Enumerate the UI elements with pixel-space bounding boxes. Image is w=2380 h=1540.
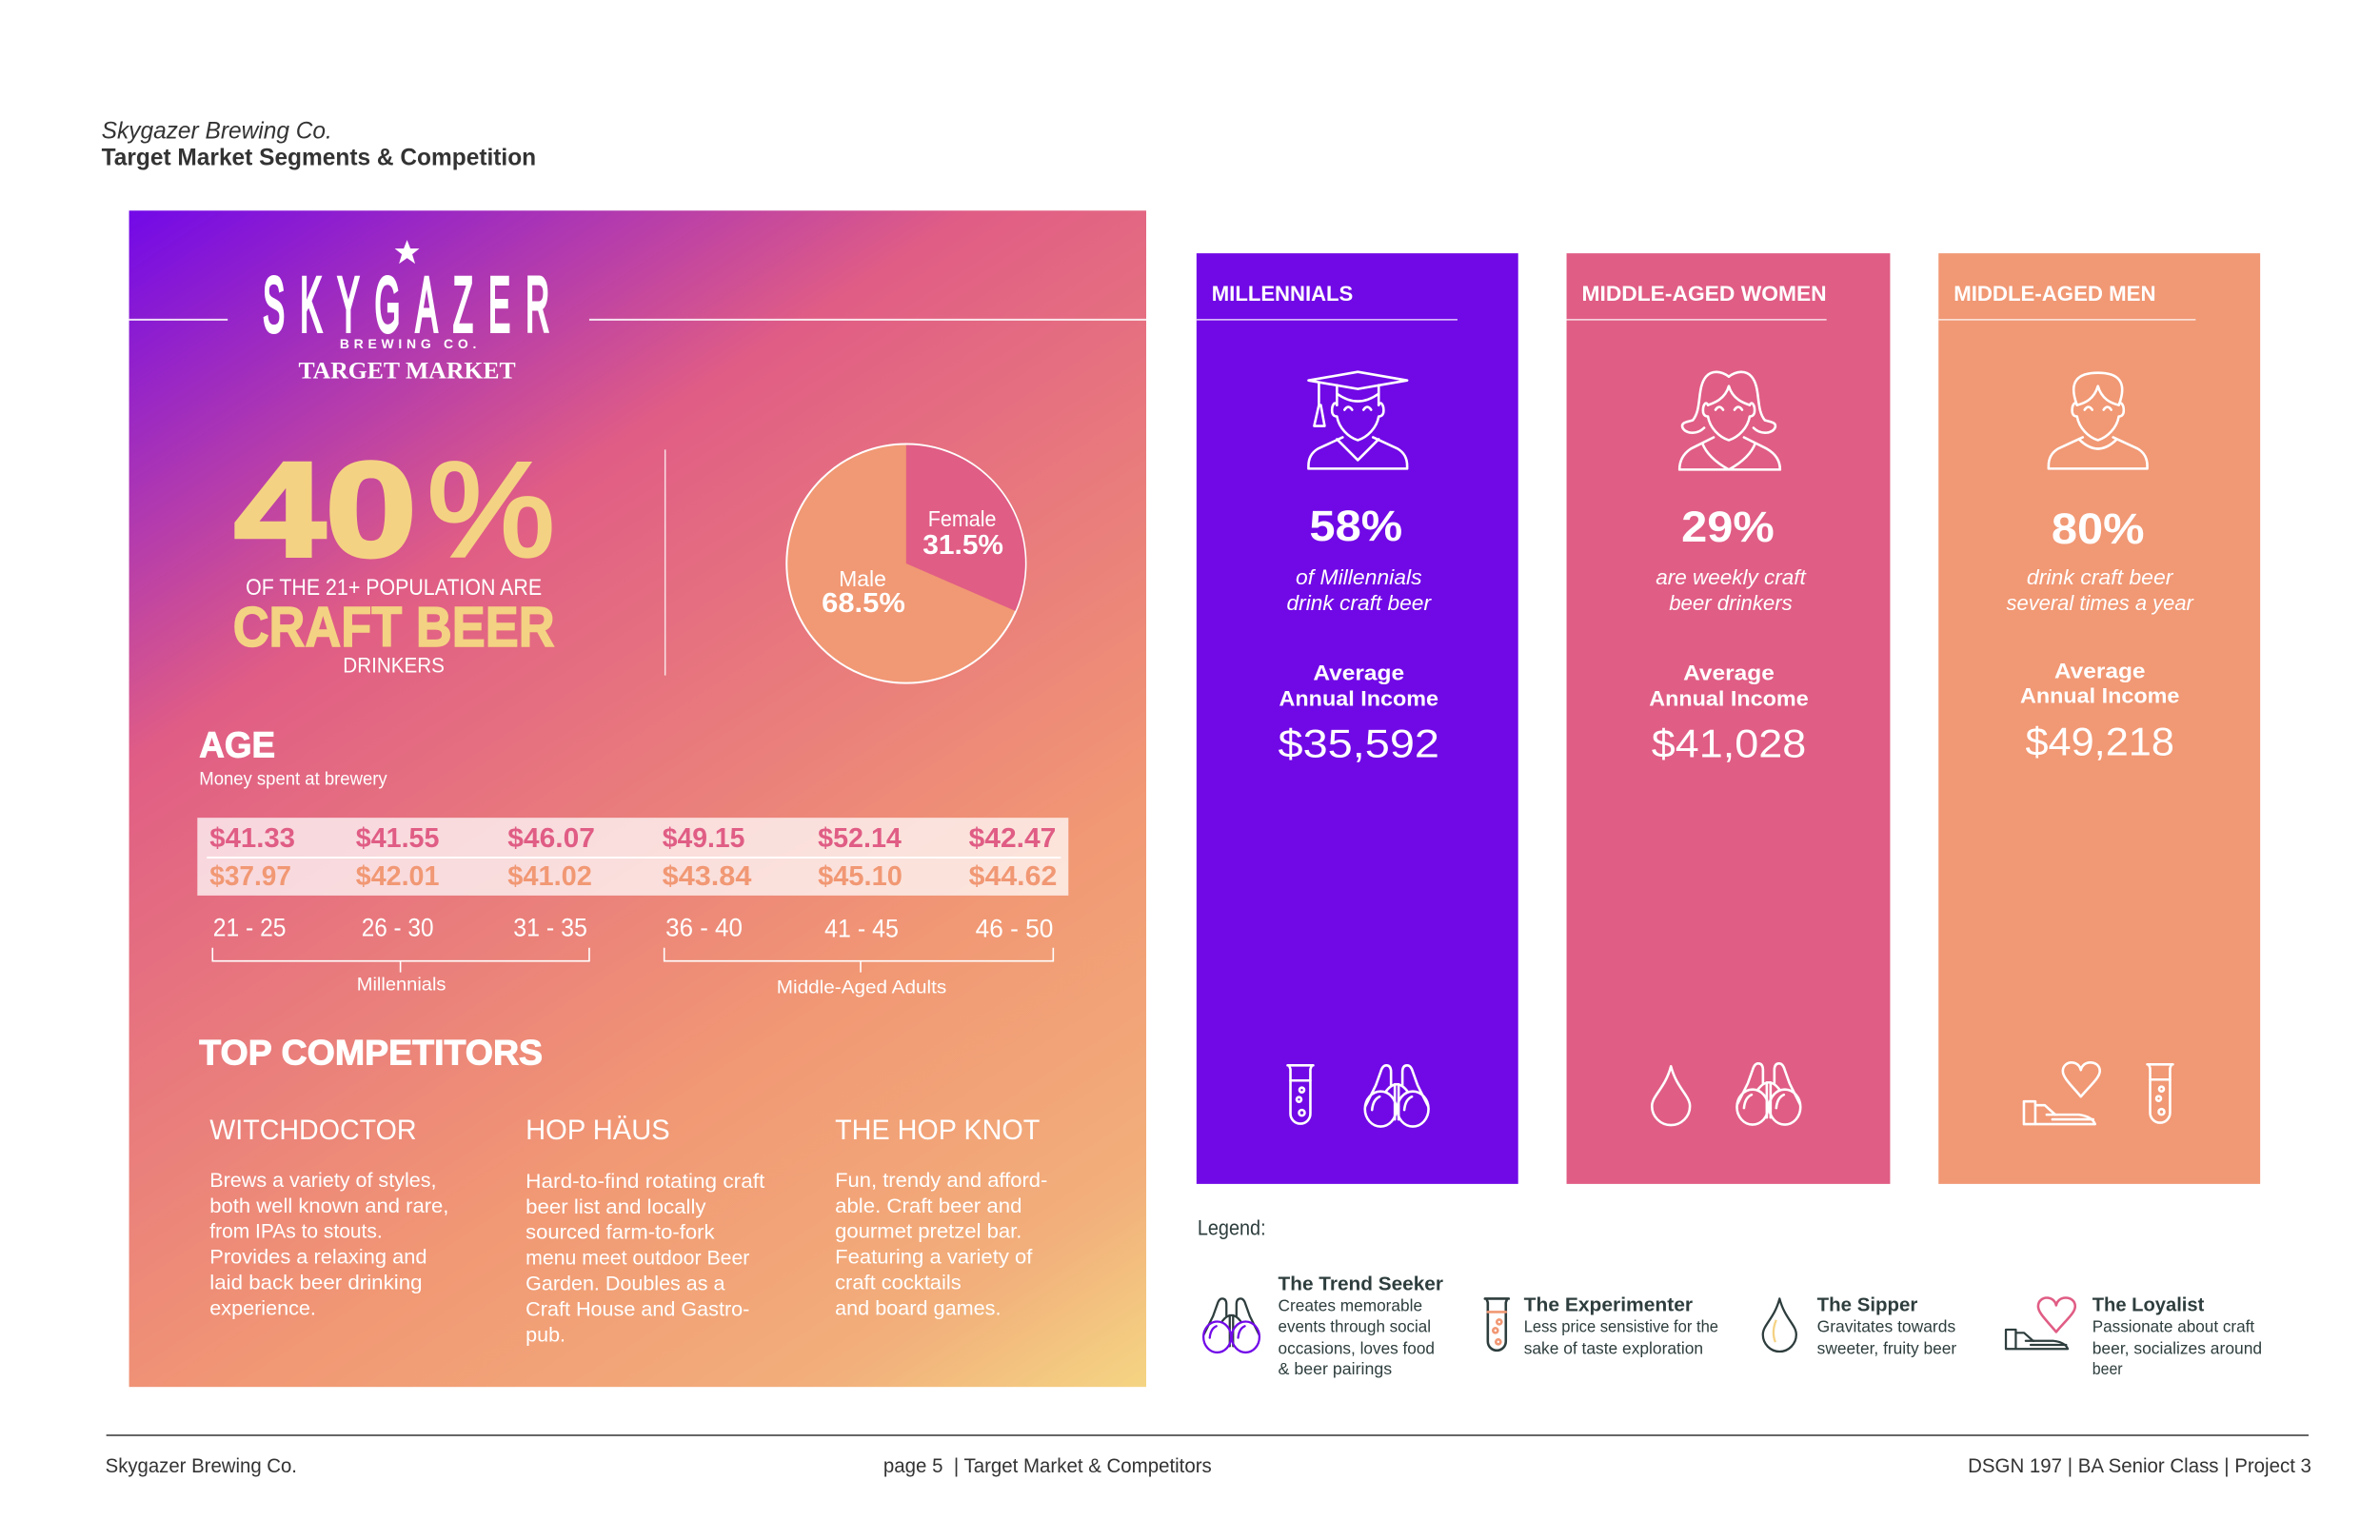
competitor: the hop knot: and board games.	[835, 1297, 1002, 1319]
competitor: the hop knot: Featuring a variety of	[835, 1247, 1033, 1269]
legend: the sipper: sweeter, fruity beer	[1817, 1338, 1956, 1357]
icon: binoculars	[1365, 1065, 1429, 1127]
statistic caption: are weekly craft	[1656, 565, 1807, 589]
bottom row values: $44.62	[969, 861, 1057, 892]
competitor: hop haus: HOP HÄUS	[526, 1115, 670, 1146]
legend: the loyalist: Passionate about craft	[2092, 1316, 2254, 1335]
gradient background	[129, 210, 1146, 1387]
competitor: witchdoctor: from IPAs to stouts.	[209, 1221, 383, 1243]
competitor: hop haus: Craft House and Gastro-	[526, 1298, 749, 1320]
income label	[1279, 661, 1438, 711]
competitors heading: TOP COMPETITORS	[199, 1033, 543, 1072]
age range labels: 31 - 35	[513, 914, 587, 942]
legend: the experimenter: sake of taste exploration	[1524, 1338, 1703, 1357]
page header	[102, 118, 536, 170]
40 percent: %	[427, 434, 555, 584]
logo	[263, 240, 549, 385]
bottom row values: $42.01	[356, 861, 439, 892]
age heading: AGE	[199, 725, 275, 765]
footer center: page 5 | Target Market & Competitors	[883, 1455, 1212, 1477]
age range labels	[213, 914, 1053, 943]
icon: binoculars	[1203, 1298, 1259, 1352]
icon: drop	[1652, 1066, 1690, 1125]
spending table band	[197, 818, 1068, 896]
top row values: $42.47	[969, 823, 1056, 854]
male label: Male	[839, 566, 886, 591]
income value: $41,028	[1652, 721, 1806, 765]
header subtitle: Target Market Segments & Competition	[102, 144, 536, 170]
middle-aged bracket	[664, 948, 1053, 973]
legend	[1198, 1216, 2262, 1378]
bottom row values: $45.10	[818, 861, 902, 892]
bottom row values: $43.84	[663, 861, 751, 892]
legend: the trend seeker: occasions, loves food	[1279, 1338, 1435, 1357]
legend: the loyalist: beer	[2092, 1359, 2123, 1378]
competitor: the hop knot	[835, 1115, 1047, 1319]
panel: middle-aged women	[1567, 253, 1890, 1184]
male slice	[786, 444, 1025, 683]
income value: $49,218	[2025, 719, 2174, 763]
top row values: $41.55	[356, 823, 439, 854]
competitor: witchdoctor: both well known and rare,	[209, 1195, 448, 1217]
age range labels: 41 - 45	[824, 915, 899, 943]
legend: the trend seeker	[1203, 1274, 1443, 1378]
legend: the trend seeker: The Trend Seeker	[1279, 1274, 1443, 1295]
legend: the loyalist	[2006, 1294, 2262, 1378]
age subheading: Money spent at brewery	[199, 769, 387, 789]
income label: Annual Income	[1649, 687, 1809, 711]
icon: woman	[1679, 372, 1780, 469]
top row values: $49.15	[663, 823, 744, 854]
competitor: witchdoctor: experience.	[209, 1297, 316, 1319]
statistic: 29%	[1681, 503, 1775, 551]
competitor: the hop knot: Fun, trendy and afford-	[835, 1170, 1047, 1192]
competitor: hop haus: pub.	[526, 1324, 565, 1346]
panel: millennials	[1197, 253, 1518, 1184]
legend: the trend seeker: events through social	[1279, 1316, 1431, 1335]
competitor: hop haus: Garden. Doubles as a	[526, 1273, 725, 1295]
icon: graduate	[1308, 372, 1407, 468]
statistic caption	[1656, 565, 1807, 615]
age range labels: 36 - 40	[665, 914, 743, 942]
legend: the sipper: The Sipper	[1817, 1294, 1918, 1315]
statistic caption: drink craft beer	[1287, 591, 1433, 615]
female slice	[906, 444, 1025, 611]
panel: target market	[129, 210, 1146, 1387]
card background	[1567, 253, 1890, 1184]
card title: MILLENNIALS	[1212, 282, 1353, 306]
millennials bracket	[212, 948, 589, 973]
competitor: hop haus: beer list and locally	[526, 1196, 706, 1218]
competitor: hop haus: Hard-to-find rotating craft	[526, 1171, 765, 1193]
competitor: witchdoctor: WITCHDOCTOR	[209, 1115, 417, 1146]
legend heading: Legend:	[1198, 1216, 1266, 1240]
bottom row values: $37.97	[209, 861, 291, 892]
legend: the sipper: Gravitates towards	[1817, 1316, 1955, 1335]
logo tagline: BREWING CO.	[340, 336, 476, 351]
statistic: 58%	[1309, 502, 1402, 550]
statistic caption: drink craft beer	[2027, 565, 2174, 589]
icon: binoculars	[1736, 1063, 1800, 1125]
card title: MIDDLE-AGED WOMEN	[1581, 282, 1827, 306]
income label	[1649, 661, 1809, 711]
competitor: the hop knot: able. Craft beer and	[835, 1195, 1021, 1217]
icon: test tube	[2148, 1064, 2172, 1123]
legend: the experimenter: Less price sensistive for the	[1524, 1316, 1718, 1335]
card background	[1197, 253, 1518, 1184]
statistic caption: OF THE 21+ POPULATION ARE	[246, 575, 542, 601]
logo wordmark: SKYGAZER	[263, 262, 549, 348]
40 percent: 40	[234, 434, 417, 584]
competitor: witchdoctor: Brews a variety of styles,	[209, 1170, 436, 1192]
headline statistic	[233, 434, 555, 678]
statistic caption	[1287, 565, 1433, 615]
age range labels: 21 - 25	[213, 914, 287, 942]
top row values: $41.33	[209, 823, 295, 854]
statistic caption: of Millennials	[1296, 565, 1422, 589]
pie chart: gender split	[786, 444, 1025, 683]
statistic caption	[2007, 565, 2195, 615]
header company name: Skygazer Brewing Co.	[102, 118, 332, 145]
income label	[2020, 660, 2179, 708]
income label: Annual Income	[1279, 687, 1438, 711]
middle-aged adults label: Middle-Aged Adults	[777, 977, 947, 998]
icon: test tube	[1485, 1298, 1509, 1351]
competitors section	[199, 1033, 1047, 1346]
competitor: hop haus: sourced farm-to-fork	[526, 1222, 715, 1244]
icon: star	[395, 240, 420, 264]
legend: the sipper	[1763, 1294, 1956, 1357]
top row values: $46.07	[507, 823, 595, 854]
income label: Annual Income	[2020, 684, 2179, 708]
competitor: witchdoctor: laid back beer drinking	[209, 1273, 423, 1294]
income label: Average	[2054, 660, 2146, 683]
icon: drop	[1763, 1298, 1796, 1352]
income label: Average	[1313, 661, 1404, 685]
statistic: 80%	[2052, 504, 2145, 553]
legend: the experimenter: The Experimenter	[1524, 1294, 1693, 1315]
card background	[1938, 253, 2260, 1184]
bottom row values	[209, 861, 1057, 892]
age range labels: 46 - 50	[976, 915, 1053, 943]
age section	[197, 725, 1068, 998]
top row values	[209, 823, 1056, 854]
competitor: the hop knot: THE HOP KNOT	[835, 1115, 1040, 1146]
competitor: witchdoctor	[209, 1115, 448, 1319]
icon: hand and heart	[2006, 1297, 2075, 1349]
legend: the trend seeker: Creates memorable	[1279, 1295, 1422, 1314]
competitor: hop haus: menu meet outdoor Beer	[526, 1248, 749, 1270]
footer left: Skygazer Brewing Co.	[106, 1455, 297, 1477]
icon: man	[2049, 373, 2148, 468]
target market heading: TARGET MARKET	[298, 359, 516, 385]
panel: middle-aged men	[1938, 253, 2260, 1184]
competitor: the hop knot: craft cocktails	[835, 1273, 962, 1294]
bottom row values: $41.02	[507, 861, 592, 892]
income value: $35,592	[1279, 721, 1439, 765]
craft beer: CRAFT BEER	[233, 595, 555, 659]
legend: the loyalist: beer, socializes around	[2092, 1338, 2262, 1357]
icon: test tube	[1288, 1065, 1313, 1124]
statistic caption: beer drinkers	[1669, 591, 1793, 615]
income label: Average	[1683, 661, 1775, 685]
female value: 31.5%	[922, 530, 1003, 561]
competitor: hop haus	[526, 1115, 765, 1346]
female label: Female	[928, 506, 997, 531]
footer right: DSGN 197 | BA Senior Class | Project 3	[1968, 1455, 2311, 1477]
footer	[106, 1435, 2311, 1477]
top row values: $52.14	[818, 823, 902, 854]
competitor: the hop knot: gourmet pretzel bar.	[835, 1221, 1021, 1243]
competitor: witchdoctor: Provides a relaxing and	[209, 1247, 427, 1269]
statistic caption: several times a year	[2007, 591, 2195, 615]
legend: the trend seeker: & beer pairings	[1279, 1359, 1392, 1378]
drinkers: DRINKERS	[343, 654, 445, 678]
legend: the loyalist: The Loyalist	[2092, 1294, 2205, 1315]
icon: loyalist hand and heart	[2024, 1062, 2100, 1124]
male value: 68.5%	[822, 588, 905, 619]
legend: the experimenter	[1485, 1294, 1718, 1357]
millennials label: Millennials	[357, 975, 446, 996]
age range labels: 26 - 30	[362, 914, 433, 942]
card title: MIDDLE-AGED MEN	[1954, 282, 2156, 306]
